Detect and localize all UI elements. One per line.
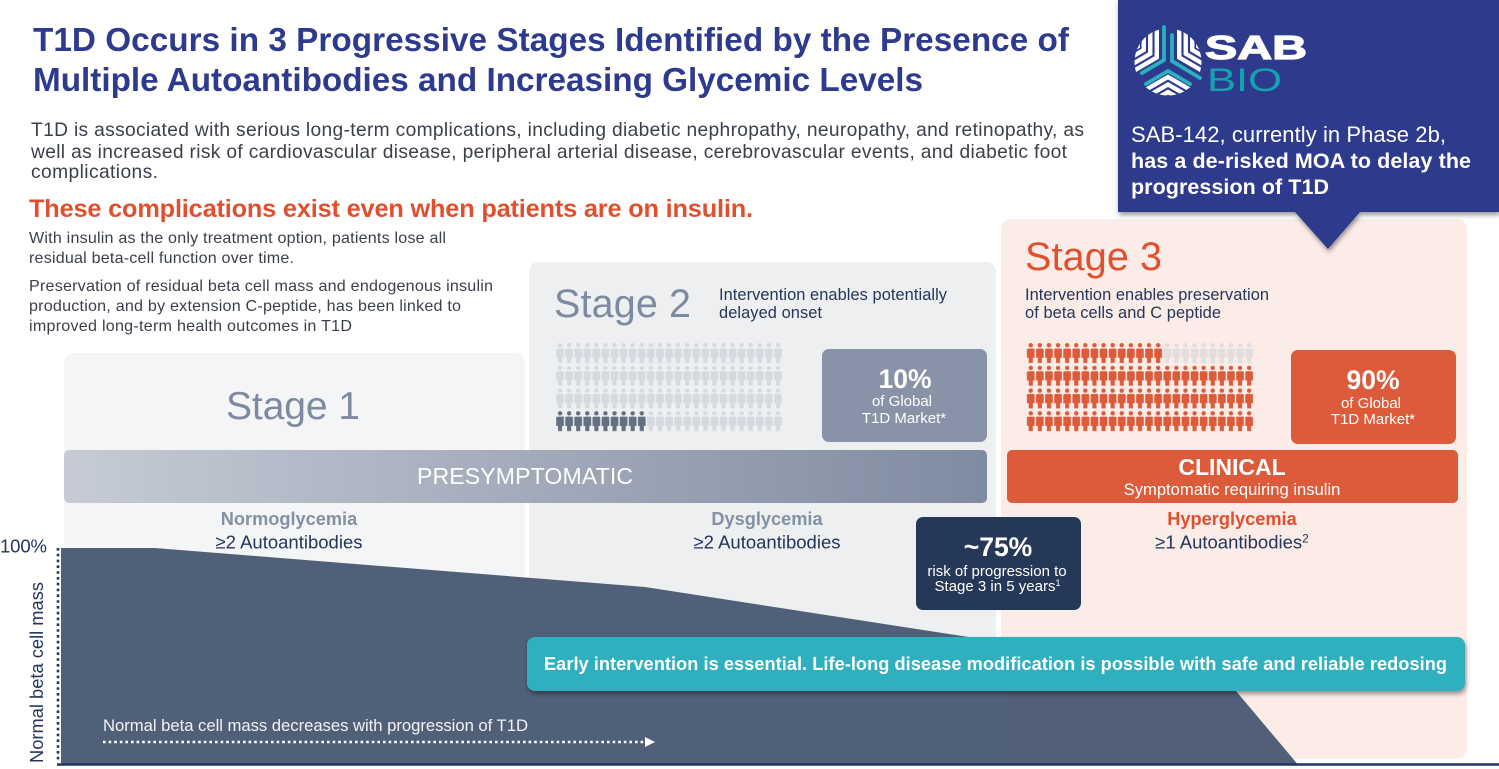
arrow: dotted progression arrow (103, 737, 655, 747)
supporting text block: improved long-term health outcomes in T1D (29, 317, 352, 335)
intro paragraph (30, 120, 1084, 183)
stat box: 90 percent of market (1291, 350, 1456, 444)
intro paragraph: complications. (31, 162, 158, 183)
stat box: 90 percent of market: 90% (1346, 365, 1400, 395)
label: hyperglycemia: ≥1 Autoantibodies (1155, 532, 1302, 552)
supporting text block: With insulin as the only treatment option, patients lose all (29, 229, 446, 247)
callout text: has a de-risked MOA to delay the (1131, 149, 1471, 173)
teal callout banner (527, 637, 1465, 691)
heading: stage 2: Stage 2 (554, 282, 691, 326)
label: hyperglycemia (1155, 509, 1309, 552)
stage 3 description: Intervention enables preservation (1025, 286, 1269, 304)
title: Multiple Autoantibodies and Increasing Glycemic Levels (33, 62, 923, 99)
red callout heading: These complications exist even when patients are on insulin. (29, 195, 753, 223)
panel: company callout (1098, 0, 1499, 249)
logo: SAB BIO: SAB (1205, 29, 1307, 66)
label: normoglycemia: Normoglycemia (221, 509, 358, 529)
logo: SAB BIO: BIO (1207, 62, 1282, 98)
icon array: stage 3, 90 percent highlighted (1026, 343, 1254, 432)
y axis label: 100 percent: 100% (0, 536, 47, 556)
panel: stage 2 background (529, 262, 996, 761)
bar: clinical: Symptomatic requiring insulin (1124, 480, 1340, 499)
stat box: 10 percent of market: 10% (878, 364, 932, 394)
callout text: SAB-142, currently in Phase 2b, (1131, 122, 1446, 147)
heading: stage 1: Stage 1 (226, 385, 360, 428)
icon: logo mark (1134, 30, 1202, 96)
panel: stage 3 background (1001, 219, 1467, 759)
label: dysglycemia: ≥2 Autoantibodies (694, 532, 840, 552)
area chart: normal beta cell mass (61, 548, 1297, 764)
label: dysglycemia: Dysglycemia (711, 509, 823, 529)
bar: clinical: CLINICAL (1178, 454, 1286, 480)
y axis dotted line (57, 548, 59, 762)
label: normoglycemia (216, 509, 362, 552)
bar: presymptomatic (64, 450, 987, 503)
stat box: 10 percent of market: T1D Market* (862, 410, 946, 427)
stat box: 10 percent of market: of Global (872, 393, 932, 410)
label: hyperglycemia: 2 (1302, 532, 1309, 546)
stage 2 description (719, 286, 948, 322)
bar: clinical (1007, 450, 1458, 503)
stat box: 10 percent of market (822, 349, 987, 442)
stat box: 75 percent risk: 1 (1055, 578, 1060, 588)
icon array: stage 2, 10 percent highlighted (556, 343, 782, 432)
logo: SAB BIO (1134, 25, 1306, 96)
stat box: 75 percent risk: Stage 3 in 5 years (935, 578, 1055, 595)
x axis line (57, 763, 1499, 766)
intro paragraph: well as increased risk of cardiovascular disease, peripheral arterial disease, cerebrovascular events, and diabetic foot (30, 142, 1068, 163)
stage 3 description (1025, 286, 1269, 322)
intro paragraph: T1D is associated with serious long-term complications, including diabetic nephropathy, neuropathy, and retinopathy, as (31, 120, 1084, 141)
callout text: progression of T1D (1131, 175, 1329, 199)
title (33, 22, 1070, 99)
supporting text block: Preservation of residual beta cell mass and endogenous insulin (29, 277, 493, 295)
stat box: 90 percent of market: T1D Market* (1331, 411, 1415, 428)
teal callout banner: Early intervention is essential. Life-long disease modification is possible with safe and reliable redosing (544, 654, 1447, 674)
stat box: 75 percent risk (916, 517, 1081, 610)
supporting text block: residual beta-cell function over time. (29, 249, 294, 267)
supporting text block (29, 229, 493, 335)
label: hyperglycemia: Hyperglycemia (1167, 509, 1298, 529)
supporting text block: production, and by extension C-peptide, has been linked to (29, 297, 461, 315)
chart annotation: Normal beta cell mass decreases with progression of T1D (103, 716, 528, 735)
stage 2 description: delayed onset (719, 304, 822, 322)
stage 2 header (554, 282, 948, 326)
label: dysglycemia (694, 509, 840, 552)
callout text (1131, 122, 1471, 199)
bar: presymptomatic: PRESYMPTOMATIC (417, 463, 633, 489)
stage 3 header (1025, 235, 1269, 322)
stage 3 description: of beta cells and C peptide (1025, 304, 1221, 322)
stat box: 75 percent risk: ~75% (964, 532, 1032, 562)
panel: stage 1 background (64, 353, 525, 762)
stat box: 90 percent of market: of Global (1341, 395, 1401, 412)
label: normoglycemia: ≥2 Autoantibodies (216, 532, 362, 552)
title: T1D Occurs in 3 Progressive Stages Identified by the Presence of (33, 22, 1070, 59)
y axis title: Normal beta cell mass (26, 582, 47, 763)
stage 2 description: Intervention enables potentially (719, 286, 948, 304)
stat box: 75 percent risk: risk of progression to (927, 563, 1067, 580)
heading: stage 3: Stage 3 (1025, 235, 1162, 279)
